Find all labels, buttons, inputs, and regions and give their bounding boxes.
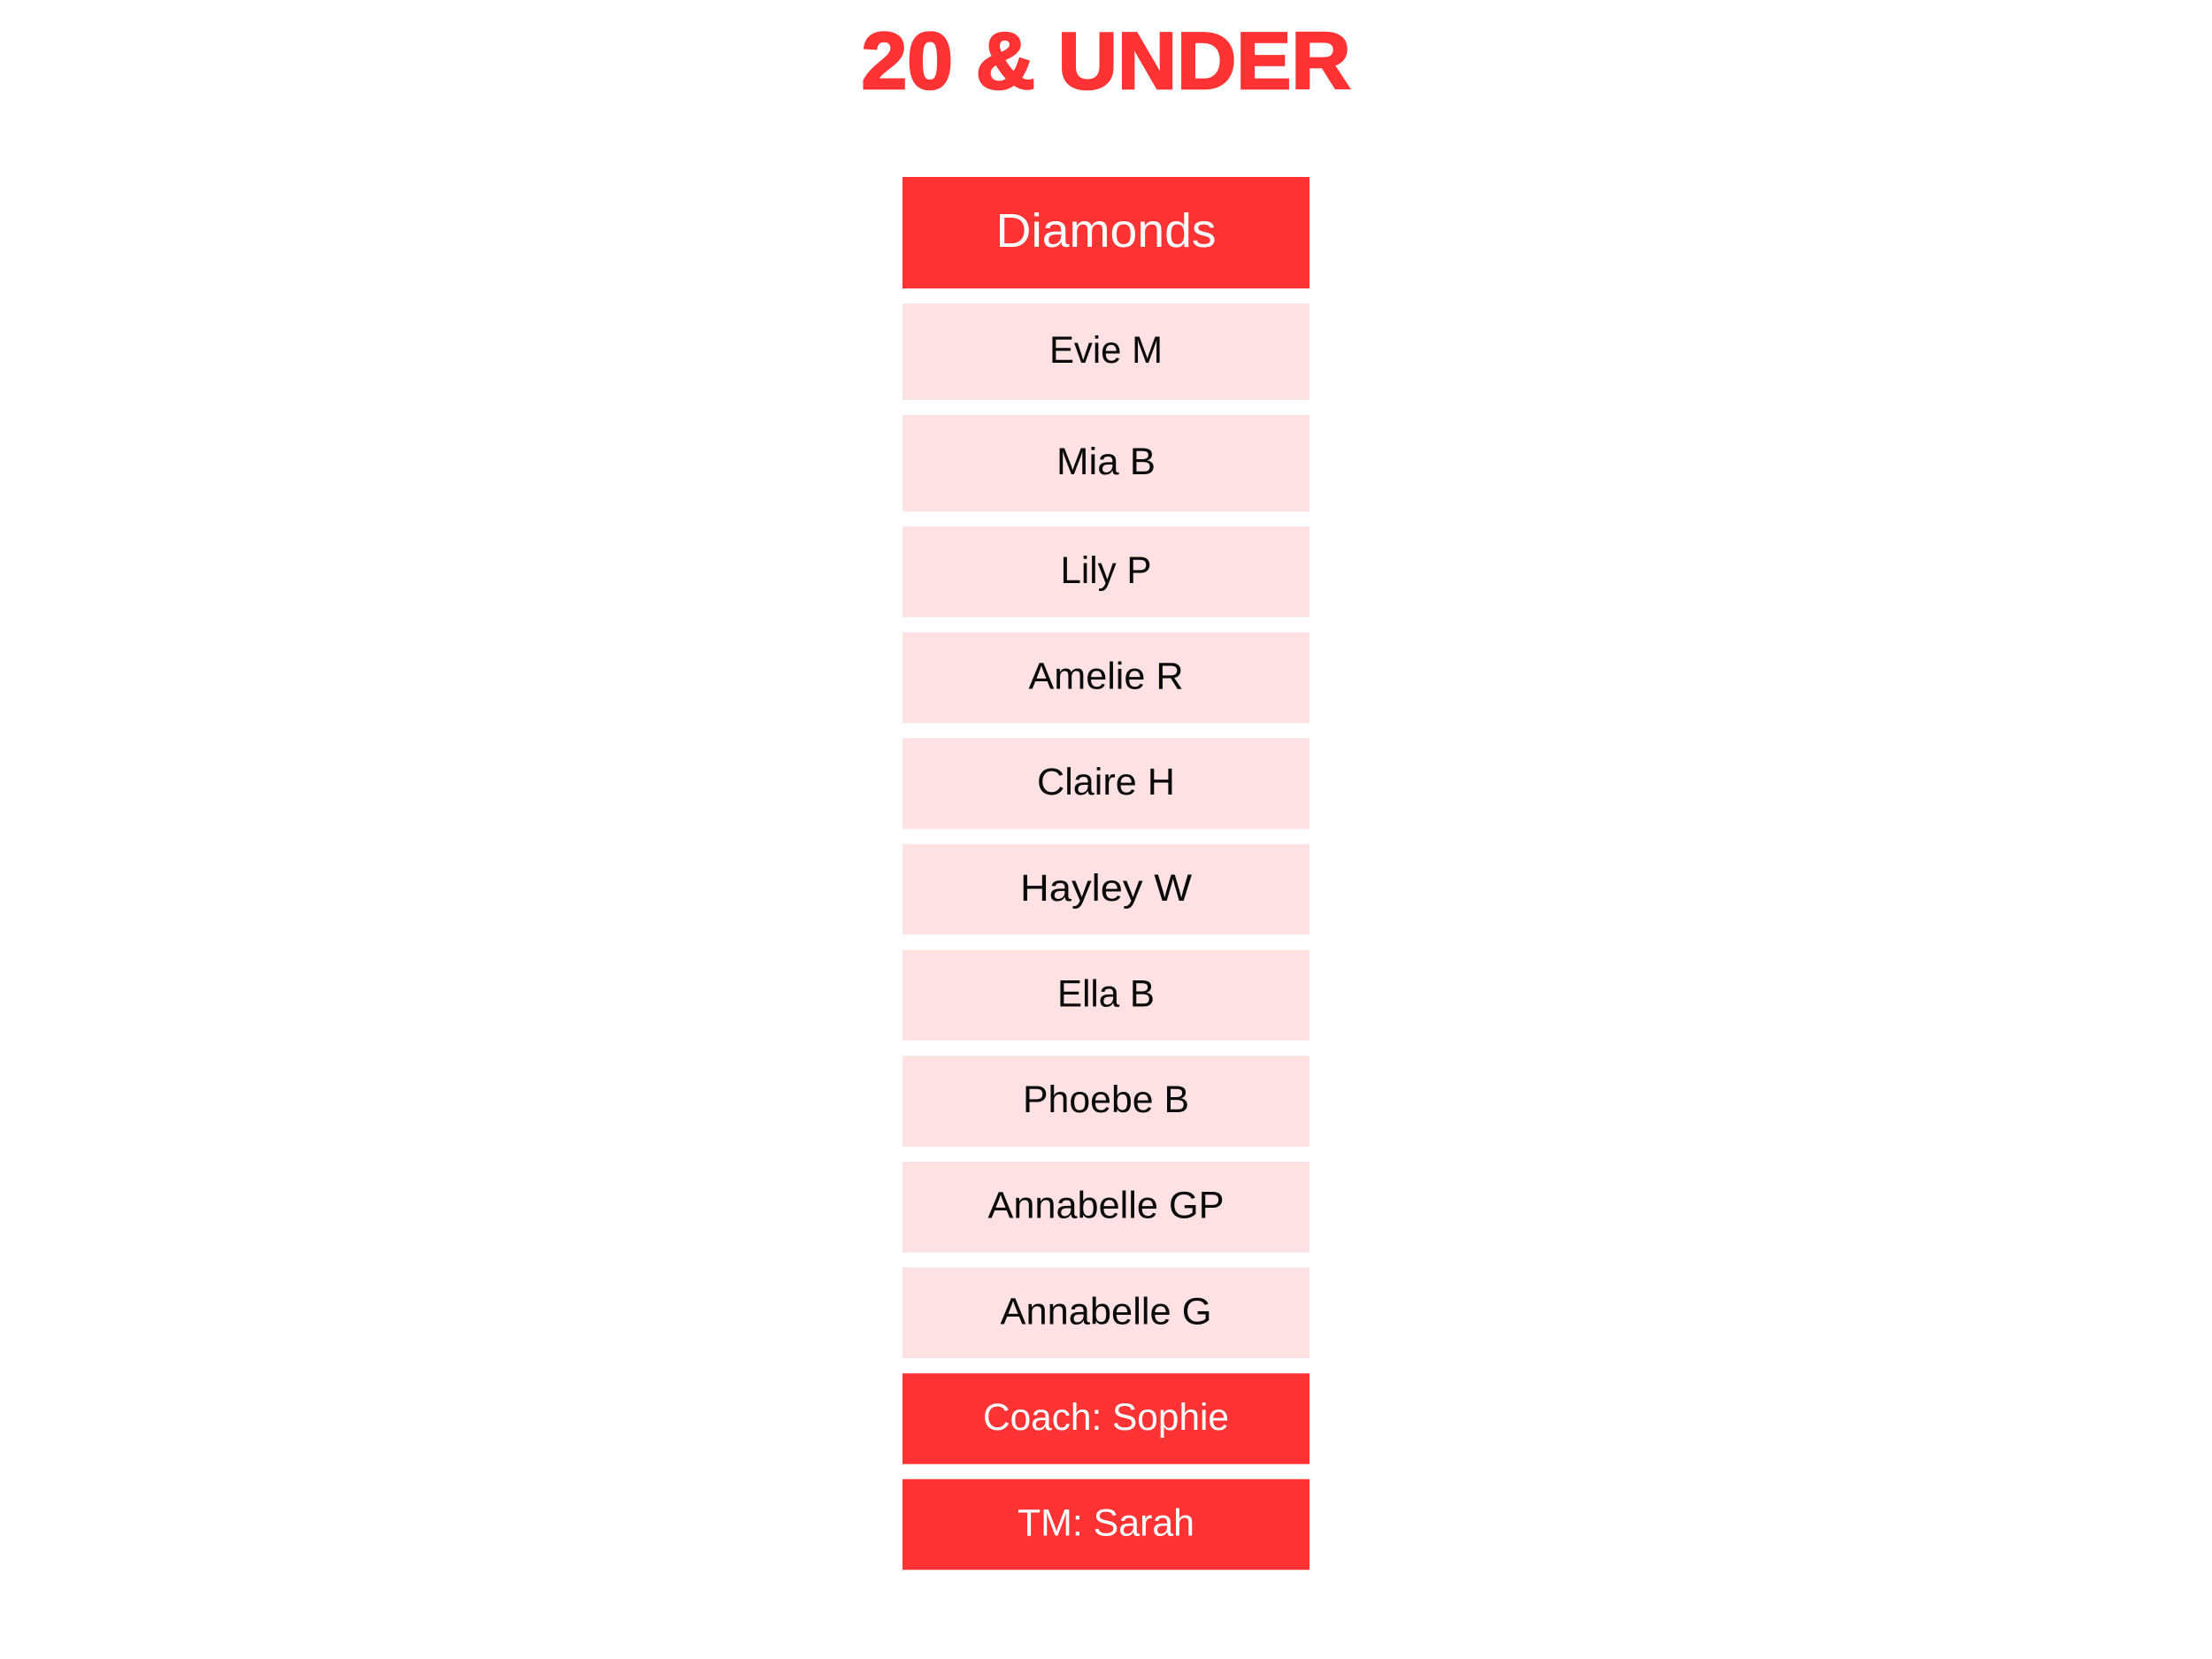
player: Hayley W: Hayley W xyxy=(1020,867,1192,910)
title: 20 & UNDER xyxy=(862,17,1350,106)
player: Evie M: Evie M xyxy=(1049,329,1163,372)
team header: Diamonds xyxy=(902,177,1310,288)
player: Annabelle G: Annabelle G xyxy=(1000,1290,1212,1333)
player: Mia B: Mia B xyxy=(1056,441,1156,483)
player: Amelie R: Amelie R xyxy=(1028,655,1184,697)
coach: Sophie xyxy=(902,1373,1310,1464)
player: Annabelle G xyxy=(902,1267,1310,1358)
team manager: Sarah: TM: Sarah xyxy=(1018,1502,1194,1545)
team header: Diamonds: Diamonds xyxy=(996,204,1216,257)
player: Lily P: Lily P xyxy=(1060,549,1152,592)
player: Mia B xyxy=(902,415,1310,511)
player: Evie M xyxy=(902,303,1310,400)
player: Phoebe B: Phoebe B xyxy=(1023,1079,1189,1121)
player: Claire H: Claire H xyxy=(1037,761,1175,803)
player: Ella B: Ella B xyxy=(1057,973,1155,1016)
player: Lily P xyxy=(902,526,1310,618)
player: Hayley W xyxy=(902,844,1310,934)
player: Amelie R xyxy=(902,633,1310,723)
player: Ella B xyxy=(902,950,1310,1041)
player: Annabelle GP: Annabelle GP xyxy=(987,1185,1225,1227)
coach: Sophie: Coach: Sophie xyxy=(983,1396,1229,1439)
player: Annabelle GP xyxy=(902,1162,1310,1253)
player: Claire H xyxy=(902,738,1310,829)
player: Phoebe B xyxy=(902,1056,1310,1147)
team manager: Sarah xyxy=(902,1479,1310,1570)
panel: team roster xyxy=(902,177,1310,1570)
